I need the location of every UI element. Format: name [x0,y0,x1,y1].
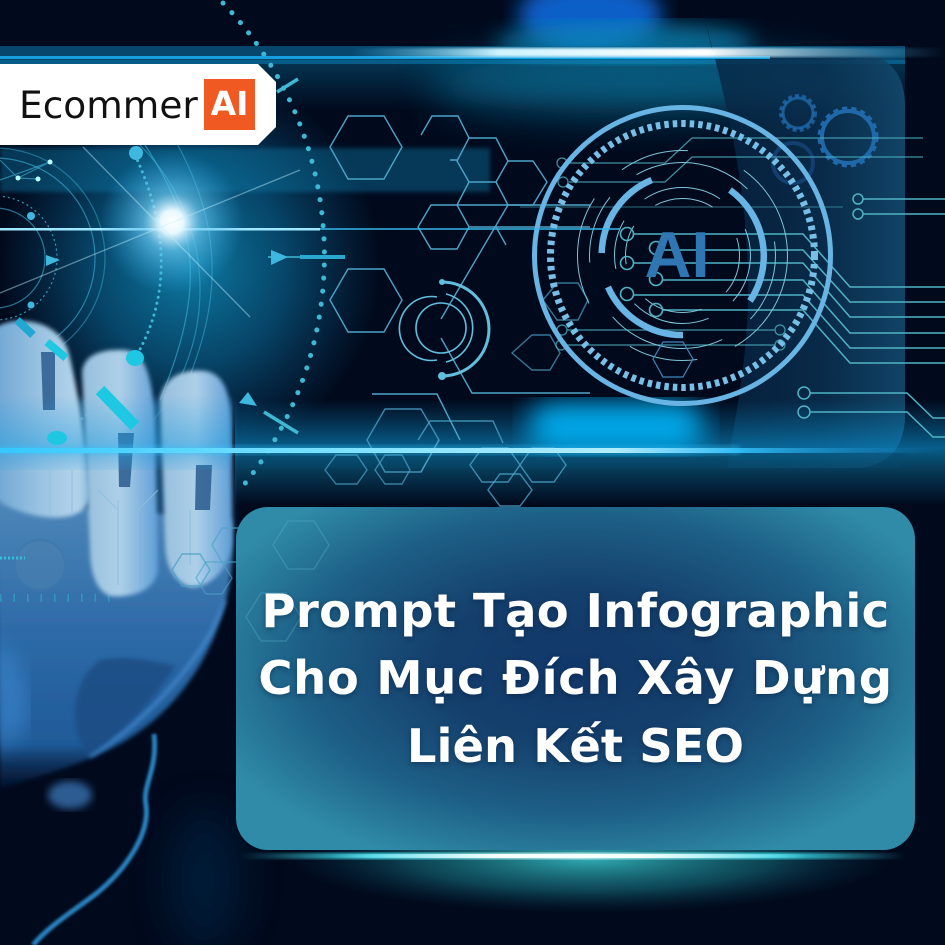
finger cyan bars [17,320,135,426]
icon: gears [773,96,876,183]
arrow markers [16,146,288,406]
robotic hand [0,320,252,945]
glow under title card [290,803,890,913]
hand backing [0,400,232,530]
translucent right panel [700,0,905,468]
scanner target rings [399,280,489,380]
small hexagons over hand [172,528,252,594]
finger 3 [160,371,232,587]
lens flare [0,147,300,317]
finger slots [41,352,212,510]
hexagon network [325,116,590,506]
title line 1: Prompt Tạo Infographic [261,584,890,638]
card hexagon decoration [246,520,330,642]
blue tint across fingers [0,395,232,470]
dotted arcs [0,3,345,492]
logo: EcommerAI [0,64,276,145]
title line 2: Cho Mục Đích Xây Dựng [258,651,893,705]
finger 2 [82,350,158,596]
palm [0,500,233,788]
title card [236,507,915,850]
title line 3: Liên Kết SEO [407,719,744,773]
AI circular HUD [534,108,830,404]
logo AI badge [204,79,255,130]
circuit lines right [520,138,945,437]
left thin HUD arcs [0,85,212,495]
wrist outline [33,734,155,945]
logo wordmark: Ecommer [19,83,198,127]
logo AI badge: AI [211,84,248,123]
mid glow band [235,400,945,505]
AI label: AI [644,218,710,291]
finger 1 [0,321,90,518]
